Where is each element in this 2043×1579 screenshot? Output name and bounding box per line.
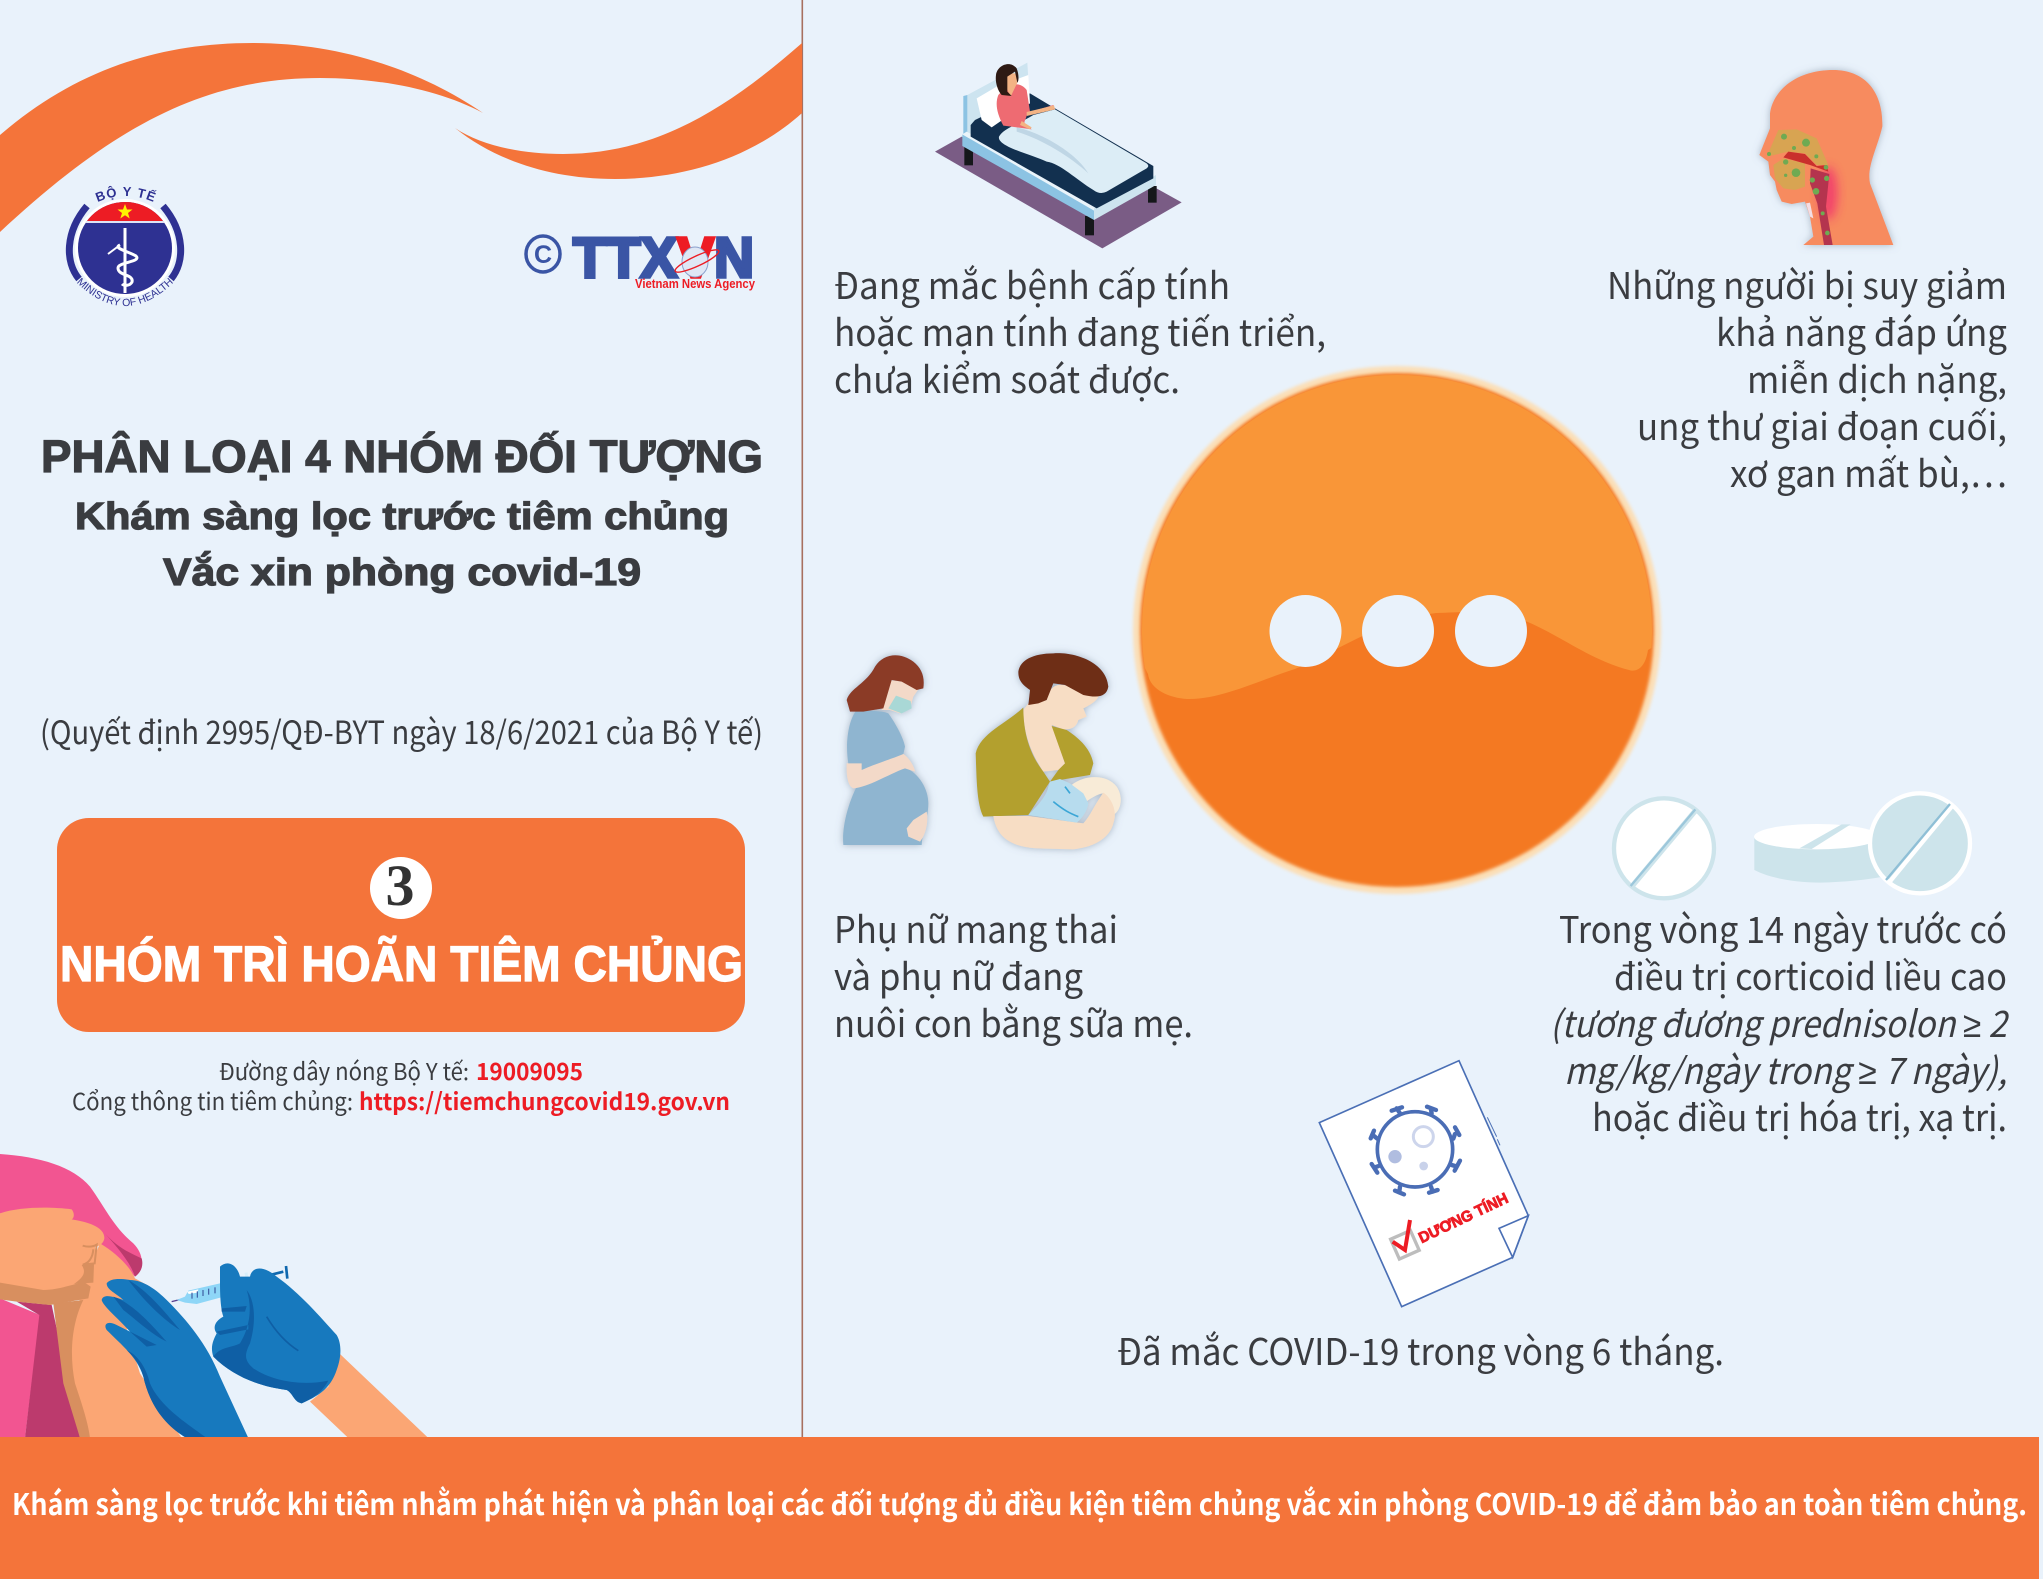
text: chronic illness: hoặc mạn tính đang tiến triển, [834, 304, 1326, 357]
nursing mother [976, 653, 1121, 849]
illustration: vaccination [0, 1154, 428, 1438]
logo: Bộ Y tế [66, 186, 184, 306]
pregnant woman [843, 655, 928, 845]
central orange circle [1130, 360, 1665, 894]
logo: TTXVN: Vietnam News Agency [635, 276, 756, 291]
text: corticoid treatment: (tương đương prednisolon ≥ 2 [1550, 995, 2010, 1048]
title [41, 431, 763, 538]
text: chronic illness: Đang mắc bệnh cấp tính [834, 257, 1230, 310]
text: immune deficiency: xơ gan mất bù,… [1730, 445, 2007, 498]
text: pregnancy [834, 901, 1193, 1048]
virus icon [1371, 1107, 1460, 1194]
text: corticoid treatment: điều trị corticoid liều cao [1614, 948, 2007, 1001]
text: had covid: Đã mắc COVID-19 trong vòng 6 tháng. [1117, 1323, 1724, 1376]
hotline [72, 1053, 730, 1117]
orange swoosh [0, 43, 802, 232]
text: chronic illness: chưa kiểm soát được. [834, 351, 1180, 404]
text: pregnancy: và phụ nữ đang [834, 948, 1083, 1001]
logo: TTXVN: TTXVN [573, 226, 754, 290]
logo: Bộ Y tế: MINISTRY OF HEALTH [77, 278, 173, 306]
hotline: Cổng thông tin tiêm chủng: [72, 1083, 353, 1117]
number 3: 3 [386, 853, 414, 918]
text: immune deficiency: Những người bị suy giảm [1607, 257, 2007, 310]
text: immune deficiency: khả năng đáp ứng [1716, 304, 2007, 357]
text: immune deficiency [1607, 257, 2007, 498]
check box [1391, 1220, 1419, 1259]
subtitle line 1: Khám sàng lọc trước tiêm chủng [75, 496, 729, 538]
text: pregnancy: Phụ nữ mang thai [834, 901, 1118, 954]
group name: NHÓM TRÌ HOÃN TIÊM CHỦNG [60, 935, 743, 992]
hotline: https://tiemchungcovid19.gov.vn [359, 1083, 730, 1117]
number 3 [370, 853, 432, 919]
bottom banner [0, 1437, 2039, 1579]
text: chronic illness [834, 257, 1326, 404]
text: pregnancy: nuôi con bằng sữa mẹ. [834, 995, 1193, 1048]
illustration: pregnant woman and nursing mother [843, 653, 1121, 849]
illustration: patient in bed [935, 63, 1182, 248]
hotline: 19009095 [476, 1053, 583, 1087]
vertical divider [802, 0, 803, 1438]
decision reference: (Quyết định 2995/QĐ-BYT ngày 18/6/2021 của Bộ Y tế) [40, 708, 763, 754]
illustration: head and throat [1759, 70, 1893, 245]
text: immune deficiency: ung thư giai đoạn cuối, [1637, 398, 2007, 451]
logo: TTXVN: C [534, 241, 552, 269]
logo: Bộ Y tế: BỘ Y TẾ [95, 186, 157, 202]
text: corticoid treatment: Trong vòng 14 ngày trước có [1559, 901, 2007, 954]
title: PHÂN LOẠI 4 NHÓM ĐỐI TƯỢNG [41, 431, 763, 482]
text: corticoid treatment [1550, 901, 2010, 1142]
panel: group 3 badge [57, 818, 745, 1032]
three dots [1270, 595, 1527, 667]
illustration: pills [1614, 793, 1970, 898]
text: immune deficiency: miễn dịch nặng, [1747, 351, 2007, 404]
text: corticoid treatment: hoặc điều trị hóa trị, xạ trị. [1592, 1089, 2007, 1142]
subtitle line 2: Vắc xin phòng covid-19 [163, 550, 641, 594]
stamp text: DƯƠNG TÍNH [1416, 1190, 1511, 1247]
hotline: Đường dây nóng Bộ Y tế: [219, 1053, 469, 1087]
text: corticoid treatment: mg/kg/ngày trong ≥ 7 ngày), [1564, 1042, 2007, 1095]
illustration: positive test document [1319, 1061, 1528, 1307]
